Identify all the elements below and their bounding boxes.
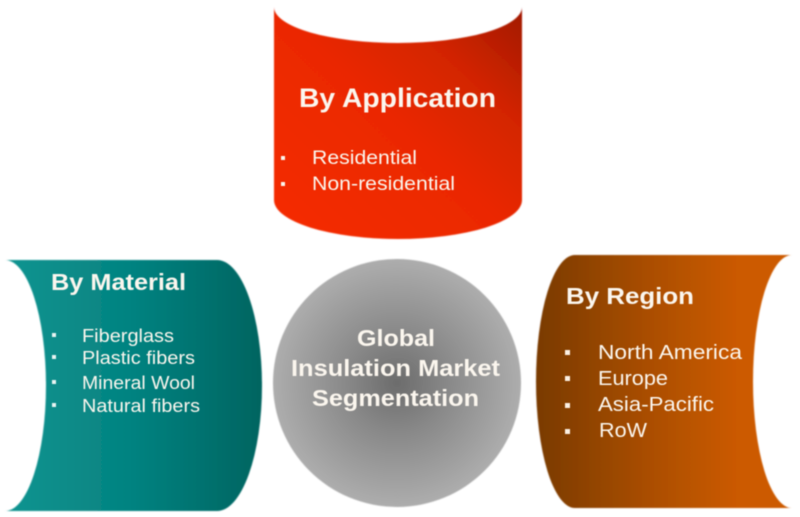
list: application segments: Residential <box>312 147 417 169</box>
list: region segments: Europe <box>598 368 668 390</box>
list: material segments <box>52 326 200 416</box>
teal curved shape <box>5 260 262 511</box>
panel: by material <box>5 260 262 511</box>
list: material segments: Mineral Wool <box>82 373 195 393</box>
center title: Segmentation <box>312 385 479 411</box>
center title <box>291 325 500 411</box>
heading: by material: By Material <box>51 269 186 295</box>
panel: by region <box>536 255 792 508</box>
panel: by application <box>274 7 522 239</box>
list: region segments: North America <box>598 342 743 364</box>
list: material segments: Natural fibers <box>82 396 200 416</box>
list: application segments: Non-residential <box>312 173 455 195</box>
list: material segments: Plastic fibers <box>82 348 195 368</box>
red cylinder shape <box>274 7 522 239</box>
list: application segments <box>281 147 455 195</box>
list: region segments: RoW <box>599 420 647 442</box>
center title: Global <box>357 325 435 351</box>
orange curved shape <box>536 255 792 508</box>
heading: by application: By Application <box>299 83 496 113</box>
panel: center circle <box>273 259 521 507</box>
list: region segments <box>565 342 743 442</box>
grey circle <box>273 259 521 507</box>
list: region segments: Asia-Pacific <box>598 394 714 416</box>
list: material segments: Fiberglass <box>82 326 174 346</box>
center title: Insulation Market <box>291 355 500 381</box>
heading: by region: By Region <box>566 283 694 309</box>
